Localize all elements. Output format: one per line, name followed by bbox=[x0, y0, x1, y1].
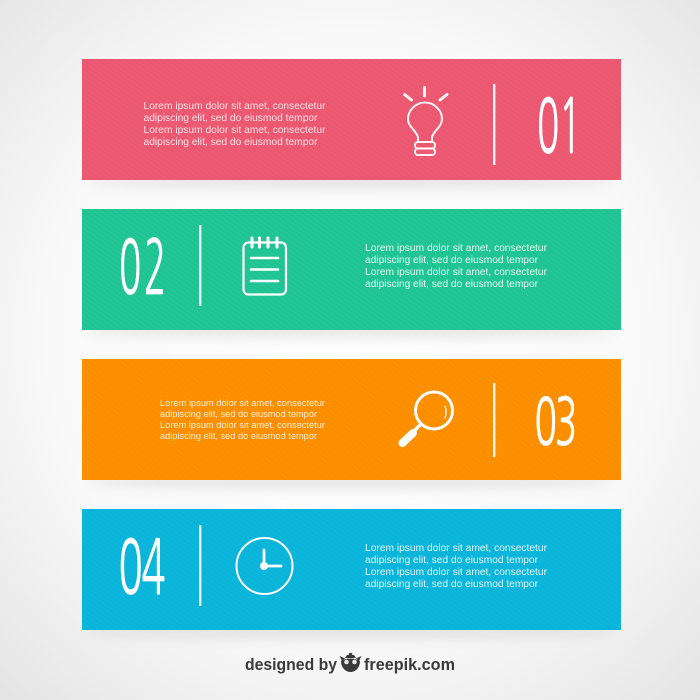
text block 2: adipiscing elit, sed do eiusmod tempor bbox=[365, 255, 539, 266]
text block 4: Lorem ipsum dolor sit amet, consectetur bbox=[365, 543, 548, 554]
text block 3: Lorem ipsum dolor sit amet, consectetur bbox=[160, 420, 325, 431]
icon: magnifying glass bbox=[402, 392, 452, 443]
text block 4: adipiscing elit, sed do eiusmod tempor bbox=[365, 555, 539, 566]
text block 4 bbox=[365, 543, 548, 590]
text block 3: adipiscing elit, sed do eiusmod tempor bbox=[160, 431, 317, 442]
number 03: 03 bbox=[534, 390, 577, 455]
text block 3: adipiscing elit, sed do eiusmod tempor bbox=[160, 409, 317, 420]
number 04: 04 bbox=[118, 530, 166, 605]
panel 1: pink banner bbox=[82, 59, 621, 189]
text block 3: Lorem ipsum dolor sit amet, consectetur bbox=[160, 398, 325, 409]
text block 2 bbox=[365, 243, 548, 290]
panel 3: orange banner bbox=[82, 359, 621, 489]
text block 3 bbox=[160, 398, 325, 442]
text block 1: adipiscing elit, sed do eiusmod tempor bbox=[144, 113, 318, 124]
number 01: 01 bbox=[537, 88, 581, 164]
icon: clock bbox=[236, 538, 292, 594]
footer credit: designed by bbox=[245, 656, 338, 674]
icon: notepad bbox=[244, 238, 286, 294]
text block 1 bbox=[144, 101, 326, 148]
panel 4: blue banner bbox=[82, 509, 621, 639]
text block 1: Lorem ipsum dolor sit amet, consectetur bbox=[144, 125, 326, 136]
divider 2 bbox=[199, 225, 201, 306]
text block 2: adipiscing elit, sed do eiusmod tempor bbox=[365, 279, 539, 290]
text block 4: adipiscing elit, sed do eiusmod tempor bbox=[365, 579, 539, 590]
icon: light bulb bbox=[404, 88, 447, 155]
footer credit bbox=[245, 653, 455, 674]
text block 2: Lorem ipsum dolor sit amet, consectetur bbox=[365, 243, 548, 254]
text block 1: adipiscing elit, sed do eiusmod tempor bbox=[144, 137, 318, 148]
footer credit: freepik.com bbox=[364, 656, 455, 674]
divider 3 bbox=[493, 383, 495, 457]
panel 2: green banner bbox=[82, 209, 621, 339]
divider 1 bbox=[493, 84, 495, 165]
text block 2: Lorem ipsum dolor sit amet, consectetur bbox=[365, 267, 548, 278]
divider 4 bbox=[199, 525, 201, 606]
text block 1: Lorem ipsum dolor sit amet, consectetur bbox=[144, 101, 326, 112]
text block 4: Lorem ipsum dolor sit amet, consectetur bbox=[365, 567, 548, 578]
icon: freepik logo bbox=[340, 653, 362, 672]
number 02: 02 bbox=[119, 229, 166, 305]
